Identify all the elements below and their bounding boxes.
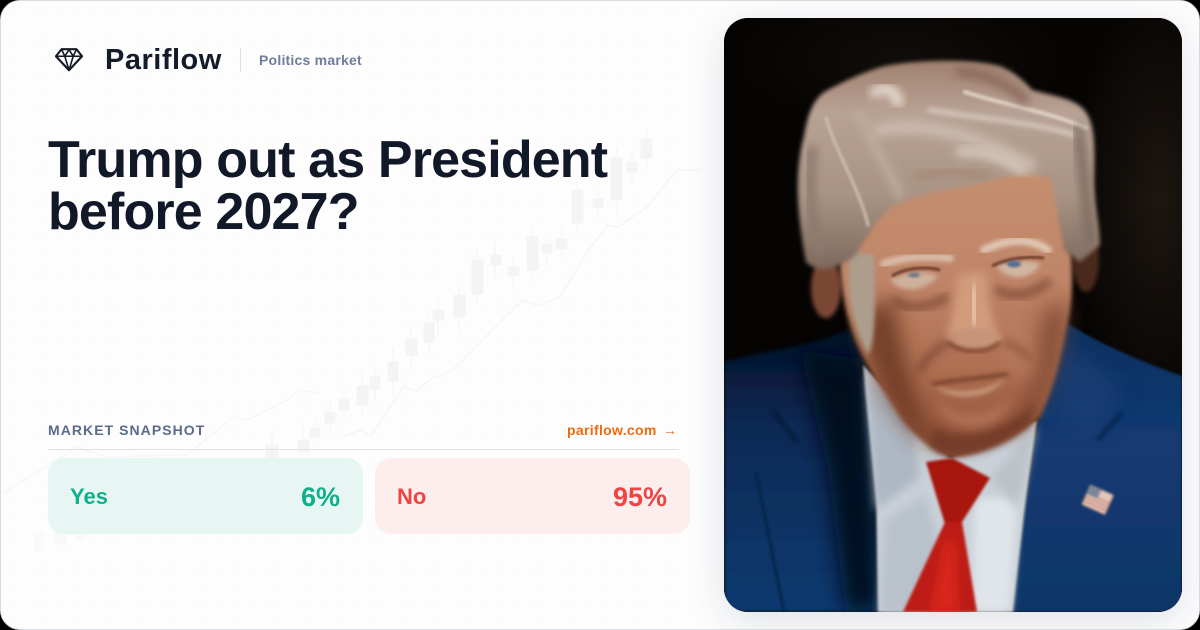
icon: diamond logo (55, 48, 83, 72)
right ear (1073, 228, 1099, 292)
section rule (48, 449, 679, 450)
brows (884, 241, 1048, 264)
nose (946, 272, 1002, 351)
category label: Politics market (259, 52, 362, 68)
brand header (55, 44, 362, 76)
left suit shoulder (724, 328, 880, 612)
headline: before 2027? (48, 183, 359, 241)
cheek and jaw shading (858, 300, 935, 452)
hair highlights (810, 72, 1090, 250)
face (840, 169, 1072, 458)
right suit shoulder (1012, 322, 1182, 612)
icon: flag lapel pin (1082, 485, 1113, 514)
portrait panel (724, 18, 1182, 612)
mouth (918, 342, 1030, 397)
panel: no outcome (375, 458, 690, 534)
no label: No (397, 484, 426, 509)
no percentage: 95% (613, 482, 667, 512)
left ear (811, 258, 841, 318)
dark backdrop (724, 18, 1182, 612)
white shirt (863, 365, 1037, 612)
panel: yes outcome (48, 458, 363, 534)
eyes (890, 257, 1050, 307)
vertical divider (240, 48, 241, 72)
sideburn (849, 252, 875, 355)
portrait illustration (724, 18, 1182, 612)
site link: pariflow.com → (567, 422, 677, 438)
headline: Trump out as President (48, 131, 607, 189)
hair mass (798, 61, 1100, 269)
section label: MARKET SNAPSHOT (48, 422, 205, 438)
brand name: Pariflow (105, 44, 222, 76)
yes percentage: 6% (301, 482, 340, 512)
yes label: Yes (70, 484, 108, 509)
headline (48, 131, 608, 241)
red tie (903, 458, 990, 612)
